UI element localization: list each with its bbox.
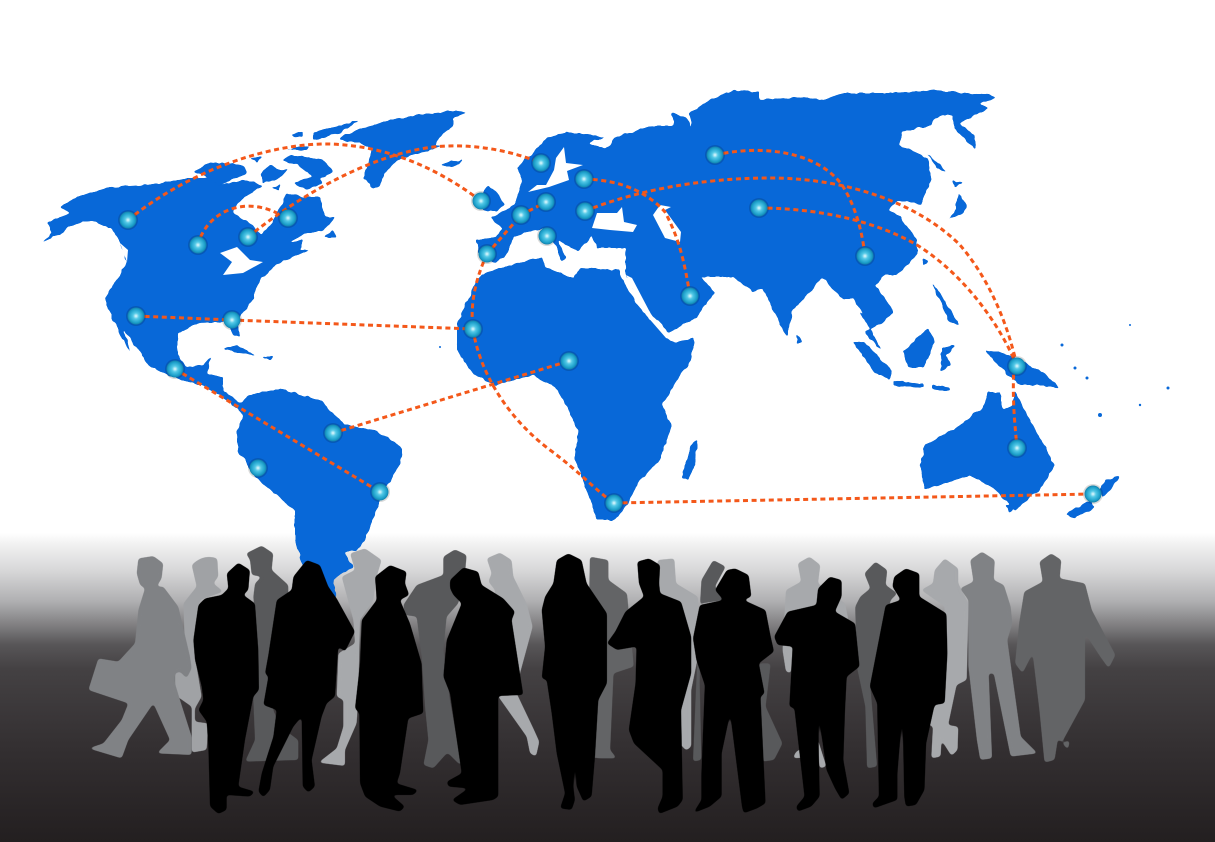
foreground crowd silhouettes right: [607, 558, 947, 814]
greenland: [340, 111, 468, 188]
australia: [920, 390, 1055, 510]
location markers: [118, 145, 1103, 513]
madagascar: [682, 440, 698, 480]
eurasia: [476, 90, 997, 352]
south america: [237, 388, 403, 597]
foreground crowd silhouettes left: [193, 553, 607, 814]
dotted route lines: [128, 144, 1093, 503]
background crowd silhouettes left: [88, 546, 539, 768]
background crowd silhouettes right: [586, 552, 1115, 768]
small pacific islands: [439, 324, 1170, 417]
arctic islands: [193, 120, 360, 190]
north america: [37, 178, 335, 415]
africa: [457, 257, 694, 520]
new zealand: [1005, 476, 1120, 518]
new guinea: [985, 350, 1060, 388]
small atlantic and caribbean islands: [222, 160, 505, 360]
asia pacific islands: [796, 150, 967, 391]
inland seas: [120, 147, 681, 340]
world map: [37, 90, 1120, 597]
